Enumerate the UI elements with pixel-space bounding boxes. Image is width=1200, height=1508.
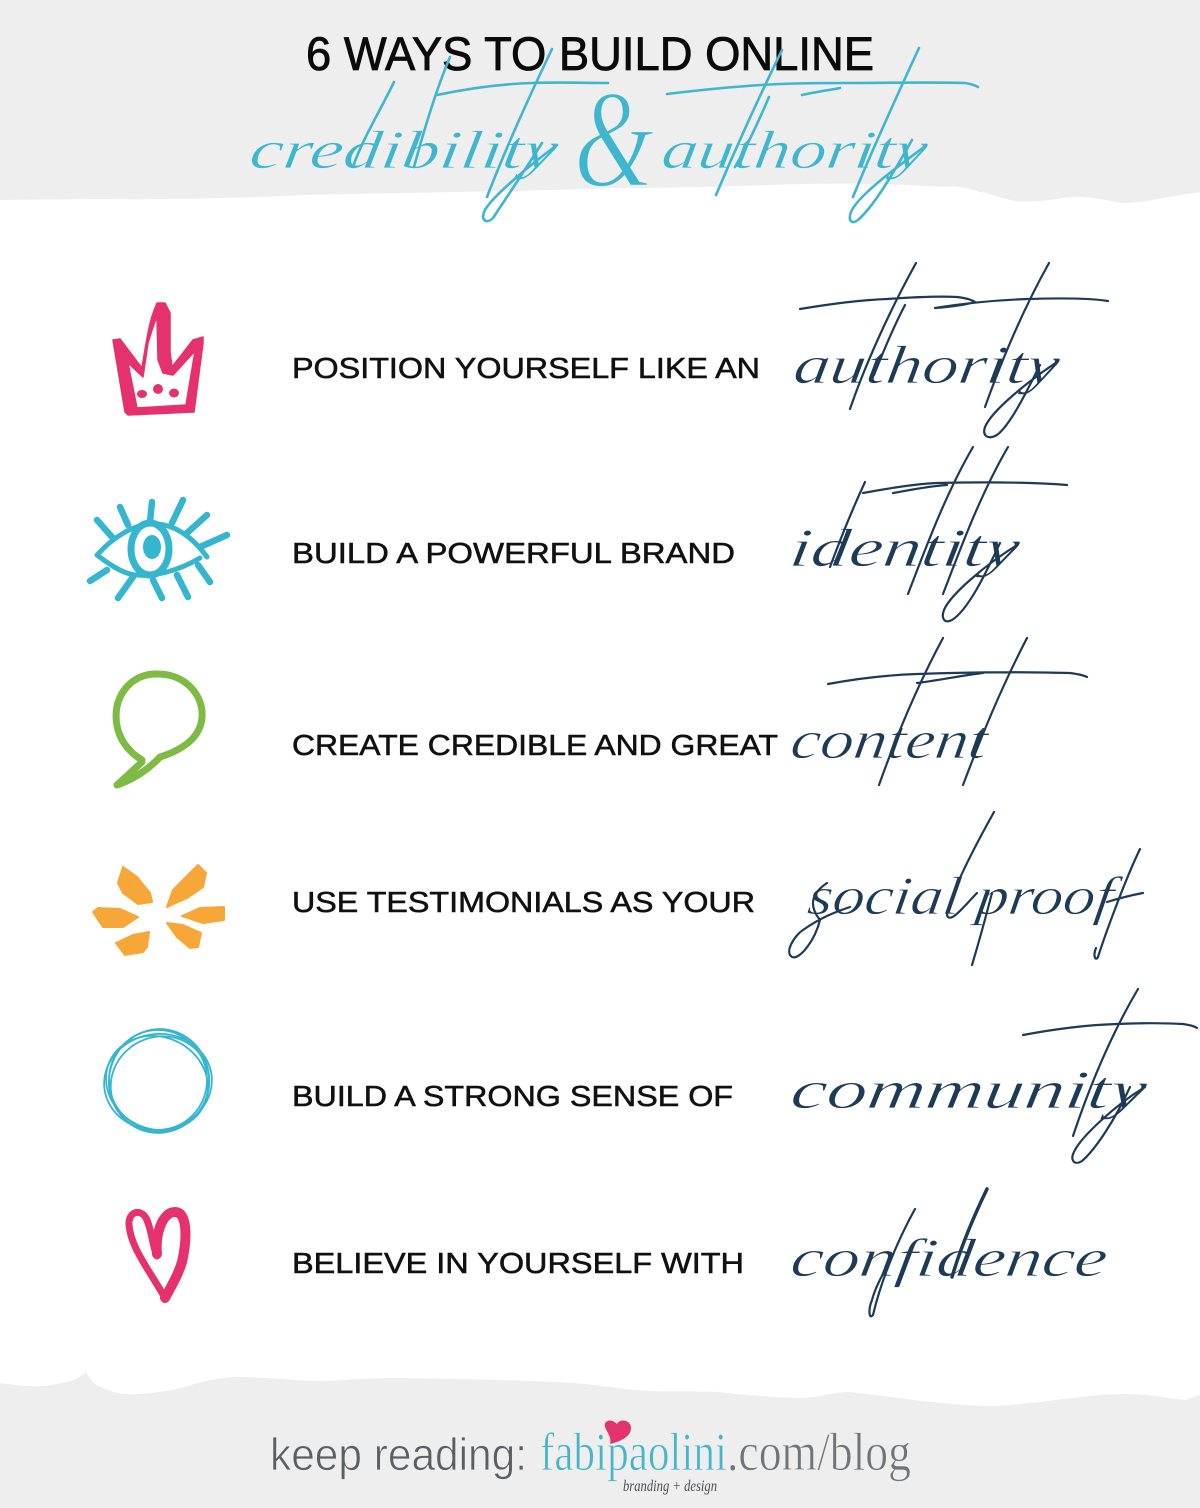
script word: authority	[790, 263, 1108, 437]
text: position yourself: POSITION YOURSELF LIKE AN	[292, 353, 760, 385]
heading: credibility and authority script	[246, 48, 978, 222]
panel: header band	[0, 0, 1200, 203]
text: branding and design: branding + design	[623, 1478, 717, 1495]
logo: fabipaolini: fabipaolini	[540, 1422, 727, 1482]
script word: authority: authority	[790, 335, 1065, 395]
script word: community: community	[787, 1060, 1152, 1120]
icon: speech bubble	[116, 674, 202, 785]
row: community	[90, 989, 1197, 1163]
icon: scribble circle	[90, 1018, 227, 1150]
heading: credibility and authority script: authority	[658, 120, 933, 180]
title	[246, 27, 978, 222]
heading: 6 ways to build online: 6 WAYS TO BUILD ONLINE	[306, 27, 874, 80]
text: testimonials: USE TESTIMONIALS AS YOUR	[292, 887, 755, 919]
script word: confidence: confidence	[787, 1228, 1112, 1288]
heading: credibility and authority script: credibility	[246, 120, 563, 180]
icon: eye	[90, 500, 227, 598]
panel: footer band	[0, 1372, 1200, 1508]
text: credible and great: CREATE CREDIBLE AND GREAT	[292, 730, 778, 762]
script word: social proof: social proof	[804, 866, 1126, 926]
icon: heart	[129, 1212, 185, 1298]
heading: credibility and authority script: &	[574, 62, 654, 217]
script word: content: content	[787, 710, 994, 770]
text: powerful brand: BUILD A POWERFUL BRAND	[292, 538, 735, 570]
icon: starburst	[93, 865, 224, 955]
text: dot com blog: .com/blog	[727, 1422, 911, 1482]
script word: community	[787, 989, 1197, 1163]
text: believe in yourself: BELIEVE IN YOURSELF WITH	[292, 1248, 744, 1280]
row: confidence	[129, 1189, 1112, 1316]
script word: identity	[786, 447, 1067, 621]
text: strong sense of: BUILD A STRONG SENSE OF	[292, 1081, 733, 1113]
icon: crown	[113, 303, 203, 415]
text: keep reading: keep reading:	[270, 1429, 527, 1480]
footer: keep reading link	[270, 1420, 911, 1495]
script word: confidence	[787, 1189, 1112, 1316]
row: authority	[113, 263, 1108, 437]
script word: identity: identity	[786, 518, 1025, 578]
icon: logo heart	[605, 1420, 631, 1444]
row: content	[116, 638, 1087, 785]
row: identity	[90, 447, 1067, 621]
script word: social proof	[789, 812, 1143, 965]
row: social proof	[93, 812, 1143, 965]
script word: content	[787, 638, 1087, 785]
